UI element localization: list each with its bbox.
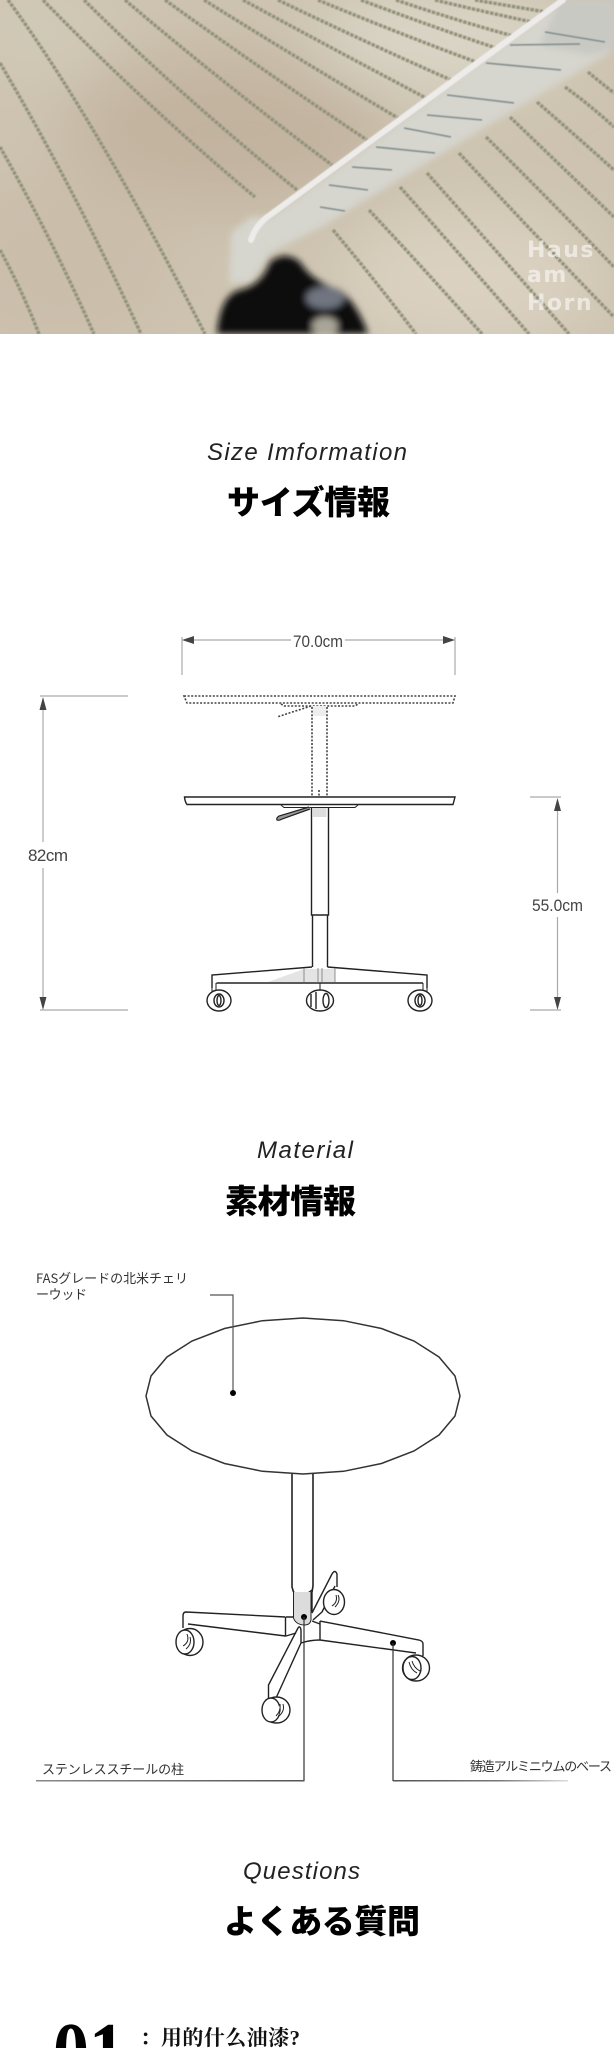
caster: front <box>262 1697 290 1723</box>
heading: Questions: Questions <box>243 1858 360 1885</box>
front arm <box>268 1627 301 1699</box>
dimension: height 82cm: 82cm <box>28 846 68 865</box>
base <box>212 967 427 988</box>
photo: fabric base <box>0 0 614 334</box>
lever <box>277 807 310 820</box>
casters <box>207 990 432 1011</box>
hub <box>286 1617 320 1643</box>
dimension: width 70.0cm <box>182 632 455 675</box>
dimension: height 55.0cm <box>530 797 583 1010</box>
photo: white table edge <box>251 0 563 240</box>
heading: Material: Material <box>257 1137 354 1164</box>
back arm <box>312 1572 337 1620</box>
caster: left <box>176 1628 203 1656</box>
heading: Size Imformation: Size Imformation <box>207 439 407 466</box>
heading: よくある質問: よくある質問 <box>224 1903 420 1940</box>
photo: black caster <box>217 256 368 335</box>
photo watermark: Haus am Horn: am <box>527 263 568 288</box>
callout: aluminium base: 鋳造アルミニウムのベース <box>470 1756 612 1775</box>
callout: aluminium base <box>390 1640 612 1782</box>
dimension: width 70.0cm: 70.0cm <box>293 632 343 651</box>
photo watermark: Haus am Horn: Haus <box>527 238 595 263</box>
table raised position (dotted) <box>184 696 455 797</box>
upper column <box>312 808 328 915</box>
material diagram <box>36 1268 612 1782</box>
table top ellipse <box>146 1318 460 1474</box>
size diagram <box>28 632 583 1011</box>
photo watermark: Haus am Horn: Horn <box>527 291 593 316</box>
heading: 素材情報: 素材情報 <box>225 1183 356 1220</box>
column and base <box>176 1474 430 1723</box>
question 01 <box>53 2006 300 2048</box>
photo: corduroy ribs <box>0 0 614 334</box>
left arm <box>183 1612 286 1636</box>
callout: wood top: FASグレードの北米チェリ <box>36 1268 188 1287</box>
caster: right <box>402 1655 430 1681</box>
callout: wood top: ーウッド <box>36 1284 87 1303</box>
hero photo: table on corduroy fabric <box>0 0 614 350</box>
table top <box>184 797 455 804</box>
callout: stainless column: ステンレススチールの柱 <box>42 1759 184 1778</box>
callout: stainless column <box>36 1614 307 1782</box>
photo watermark: Haus am Horn <box>528 240 592 310</box>
callout: wood top <box>36 1268 236 1396</box>
photo: table underside <box>229 0 614 283</box>
dimension: height 55.0cm: 55.0cm <box>532 896 583 915</box>
lower column <box>312 915 328 967</box>
table lowered position (solid) <box>184 797 455 1011</box>
right arm <box>320 1621 423 1656</box>
photo: wood grain lines <box>320 32 605 211</box>
dimension: height 82cm <box>28 696 128 1010</box>
caster: back <box>324 1590 344 1614</box>
heading: サイズ情報: サイズ情報 <box>227 484 390 521</box>
